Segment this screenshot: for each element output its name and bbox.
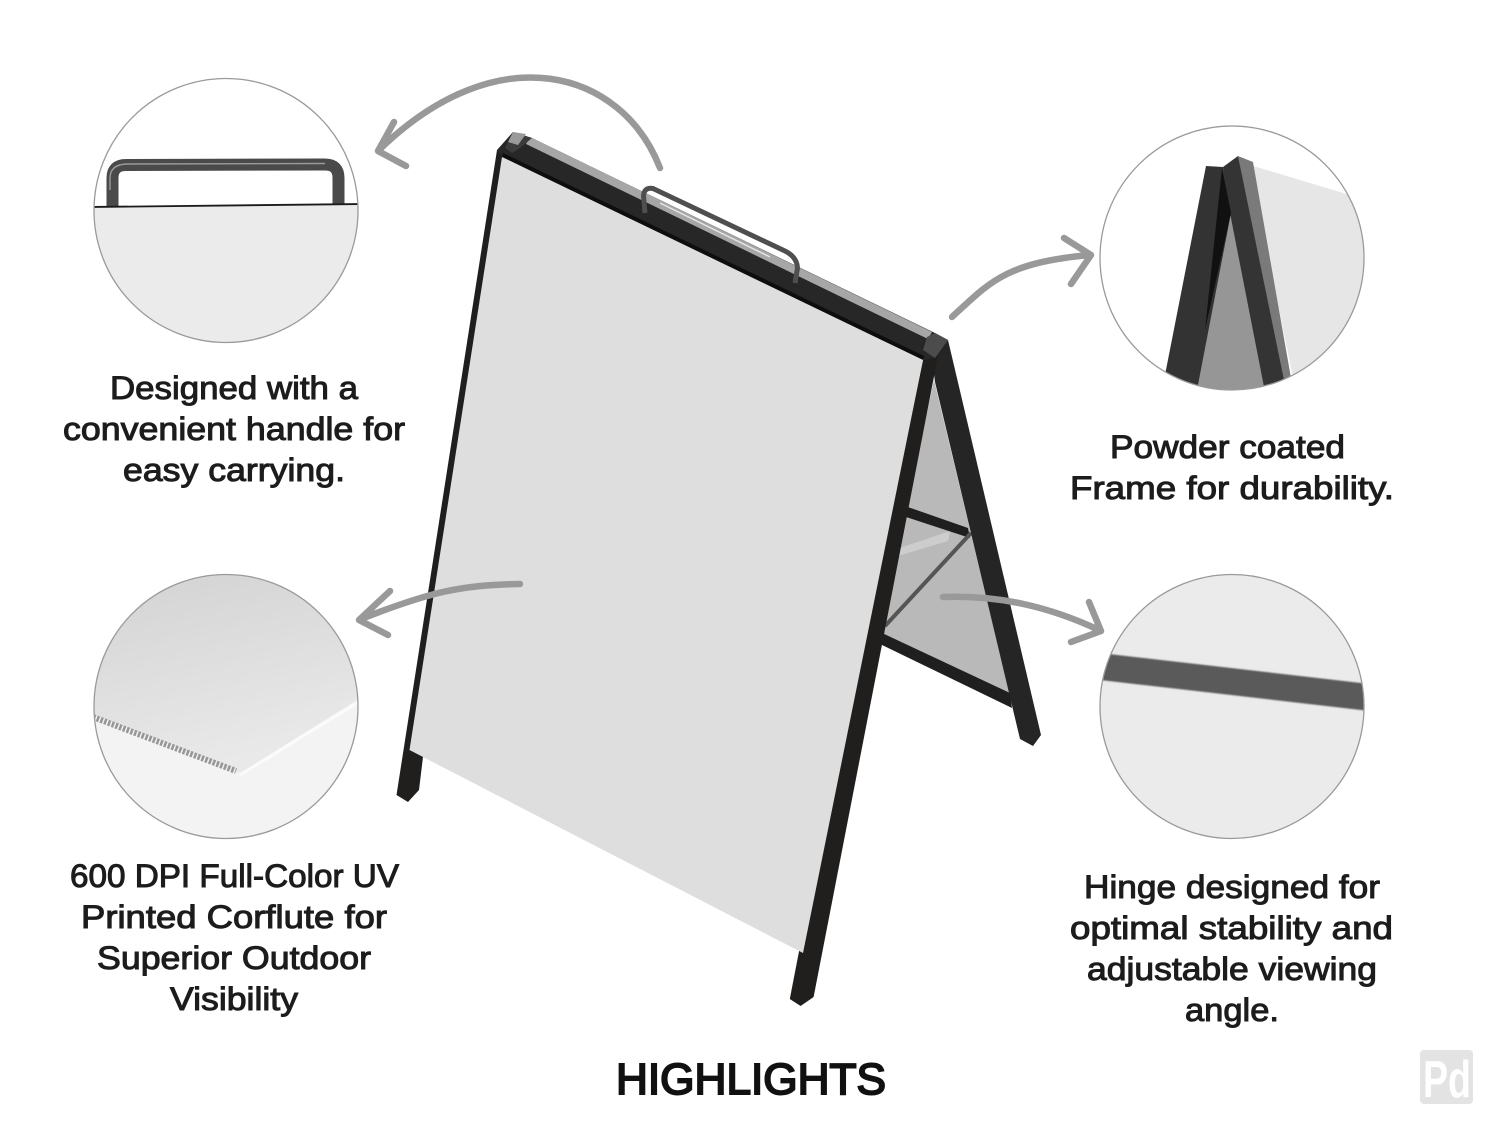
carry handle	[644, 188, 798, 283]
right corner cap	[923, 333, 948, 358]
text: hinge caption: angle.	[1185, 992, 1279, 1028]
front right leg	[790, 356, 938, 1006]
text: frame caption: Frame for durability.	[1070, 470, 1394, 506]
circle: handle detail	[90, 75, 365, 347]
text: corflute caption: Printed Corflute for	[81, 899, 387, 935]
back panel highlight streak	[898, 531, 950, 556]
main white board panel	[410, 157, 923, 953]
text: corflute caption: Superior Outdoor	[97, 940, 371, 976]
text: hinge caption: adjustable viewing	[1087, 951, 1377, 987]
circle: hinge detail	[1095, 570, 1370, 842]
A-frame sign product illustration	[396, 132, 1041, 1006]
text: handle caption	[63, 370, 405, 488]
top rail black lower edge	[502, 153, 924, 360]
top rail light edge	[526, 137, 932, 339]
text: hinge caption: Hinge designed for	[1084, 869, 1380, 905]
text: handle caption: convenient handle for	[63, 411, 405, 447]
front left leg	[396, 150, 506, 802]
title: highlights: HIGHLIGHTS	[616, 1055, 886, 1104]
left corner cap	[505, 132, 532, 153]
upper cross bar	[903, 506, 970, 538]
text: hinge caption	[1070, 869, 1393, 1028]
lower cross bar	[880, 632, 1012, 708]
circle: corflute detail	[90, 570, 365, 842]
text: handle caption: easy carrying.	[123, 452, 345, 488]
text: corflute caption	[70, 858, 400, 1017]
arrow: to frame detail	[952, 238, 1091, 317]
arrow: to hinge detail	[943, 597, 1101, 642]
text: frame caption: Powder coated	[1110, 429, 1345, 465]
text: handle caption: Designed with a	[110, 370, 358, 406]
back panel of sign	[880, 380, 1010, 696]
text: corflute caption: Visibility	[170, 981, 298, 1017]
back leg	[932, 340, 1041, 746]
text: corflute caption: 600 DPI Full-Color UV	[70, 858, 400, 894]
text: frame caption	[1070, 429, 1394, 506]
diagonal brace	[885, 533, 971, 626]
top frame rail	[497, 132, 948, 360]
icon: Pd watermark logo: Pd	[1423, 1051, 1471, 1109]
text: hinge caption: optimal stability and	[1070, 910, 1393, 946]
arrow: to corflute detail	[359, 584, 520, 635]
circle: powder coated frame detail	[1095, 122, 1370, 395]
arrow: to handle detail	[378, 77, 660, 168]
